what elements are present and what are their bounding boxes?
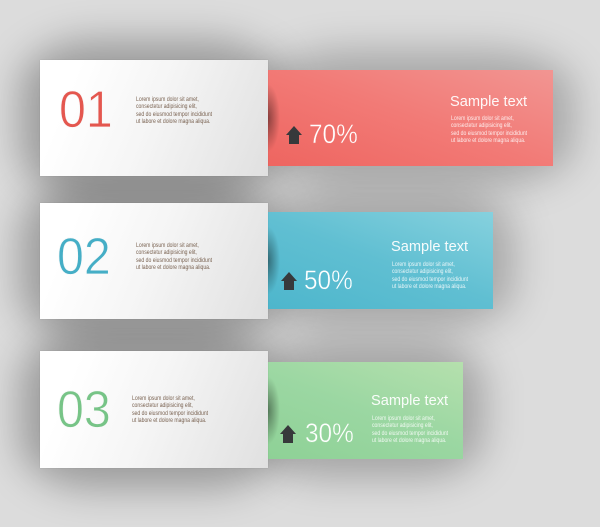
icon: up arrow green <box>280 425 296 443</box>
panel: 03 white card <box>40 351 268 468</box>
text block: card 02: consectetur adipisicing elit, <box>136 249 197 256</box>
text block: red band: Lorem ipsum dolor sit amet, <box>451 115 514 122</box>
heading: sample text red: Sample text <box>450 94 527 110</box>
text block: card 02: Lorem ipsum dolor sit amet, <box>136 242 199 249</box>
number 03: 03 <box>57 381 111 439</box>
text block: red band <box>451 115 527 144</box>
text block: card 02: ut labore et dolore magna aliqua. <box>136 264 210 271</box>
text block: red band: consectetur adipisicing elit, <box>451 122 512 129</box>
text block: green band: Lorem ipsum dolor sit amet, <box>372 415 435 422</box>
text block: green band: sed do eiusmod tempor incididunt <box>372 430 448 437</box>
panel: 03 green band <box>268 362 463 459</box>
text block: card 01: Lorem ipsum dolor sit amet, <box>136 96 199 103</box>
text block: card 03 <box>132 395 208 424</box>
panel: 01 red band <box>268 70 553 166</box>
number 02: 02 <box>57 228 111 286</box>
heading: sample text green: Sample text <box>371 393 448 409</box>
percentage: 30%: 30% <box>305 418 354 448</box>
text block: blue band: ut labore et dolore magna aliqua. <box>392 283 466 290</box>
percentage: 70%: 70% <box>309 119 358 149</box>
percentage: 50%: 50% <box>304 265 353 295</box>
text block: red band: ut labore et dolore magna aliqua. <box>451 137 525 144</box>
text block: blue band: sed do eiusmod tempor incididunt <box>392 276 468 283</box>
panel: 02 white card <box>40 203 268 319</box>
text block: card 03: consectetur adipisicing elit, <box>132 402 193 409</box>
text block: red band: sed do eiusmod tempor incididunt <box>451 130 527 137</box>
inner shadow: green band <box>268 362 288 459</box>
text block: card 01 <box>136 96 212 125</box>
text block: card 01: sed do eiusmod tempor incididunt <box>136 111 212 118</box>
text block: blue band: consectetur adipisicing elit, <box>392 268 453 275</box>
number 01: 01 <box>59 81 113 139</box>
inner shadow: red band <box>268 70 288 166</box>
text block: blue band <box>392 261 468 290</box>
text block: card 02: sed do eiusmod tempor incididunt <box>136 257 212 264</box>
text block: green band <box>372 415 448 444</box>
text block: card 03: Lorem ipsum dolor sit amet, <box>132 395 195 402</box>
inner shadow: blue band <box>268 212 288 309</box>
text block: blue band: Lorem ipsum dolor sit amet, <box>392 261 455 268</box>
icon: up arrow red <box>286 126 302 144</box>
panel: 01 white card <box>40 60 268 176</box>
icon: up arrow blue <box>281 272 297 290</box>
text block: card 01: consectetur adipisicing elit, <box>136 103 197 110</box>
text block: green band: consectetur adipisicing elit, <box>372 422 433 429</box>
text block: card 03: sed do eiusmod tempor incididunt <box>132 410 208 417</box>
text block: card 01: ut labore et dolore magna aliqua. <box>136 118 210 125</box>
heading: sample text blue: Sample text <box>391 239 468 255</box>
panel: 02 blue band <box>268 212 493 309</box>
text block: green band: ut labore et dolore magna aliqua. <box>372 437 446 444</box>
text block: card 02 <box>136 242 212 271</box>
text block: card 03: ut labore et dolore magna aliqua. <box>132 417 206 424</box>
